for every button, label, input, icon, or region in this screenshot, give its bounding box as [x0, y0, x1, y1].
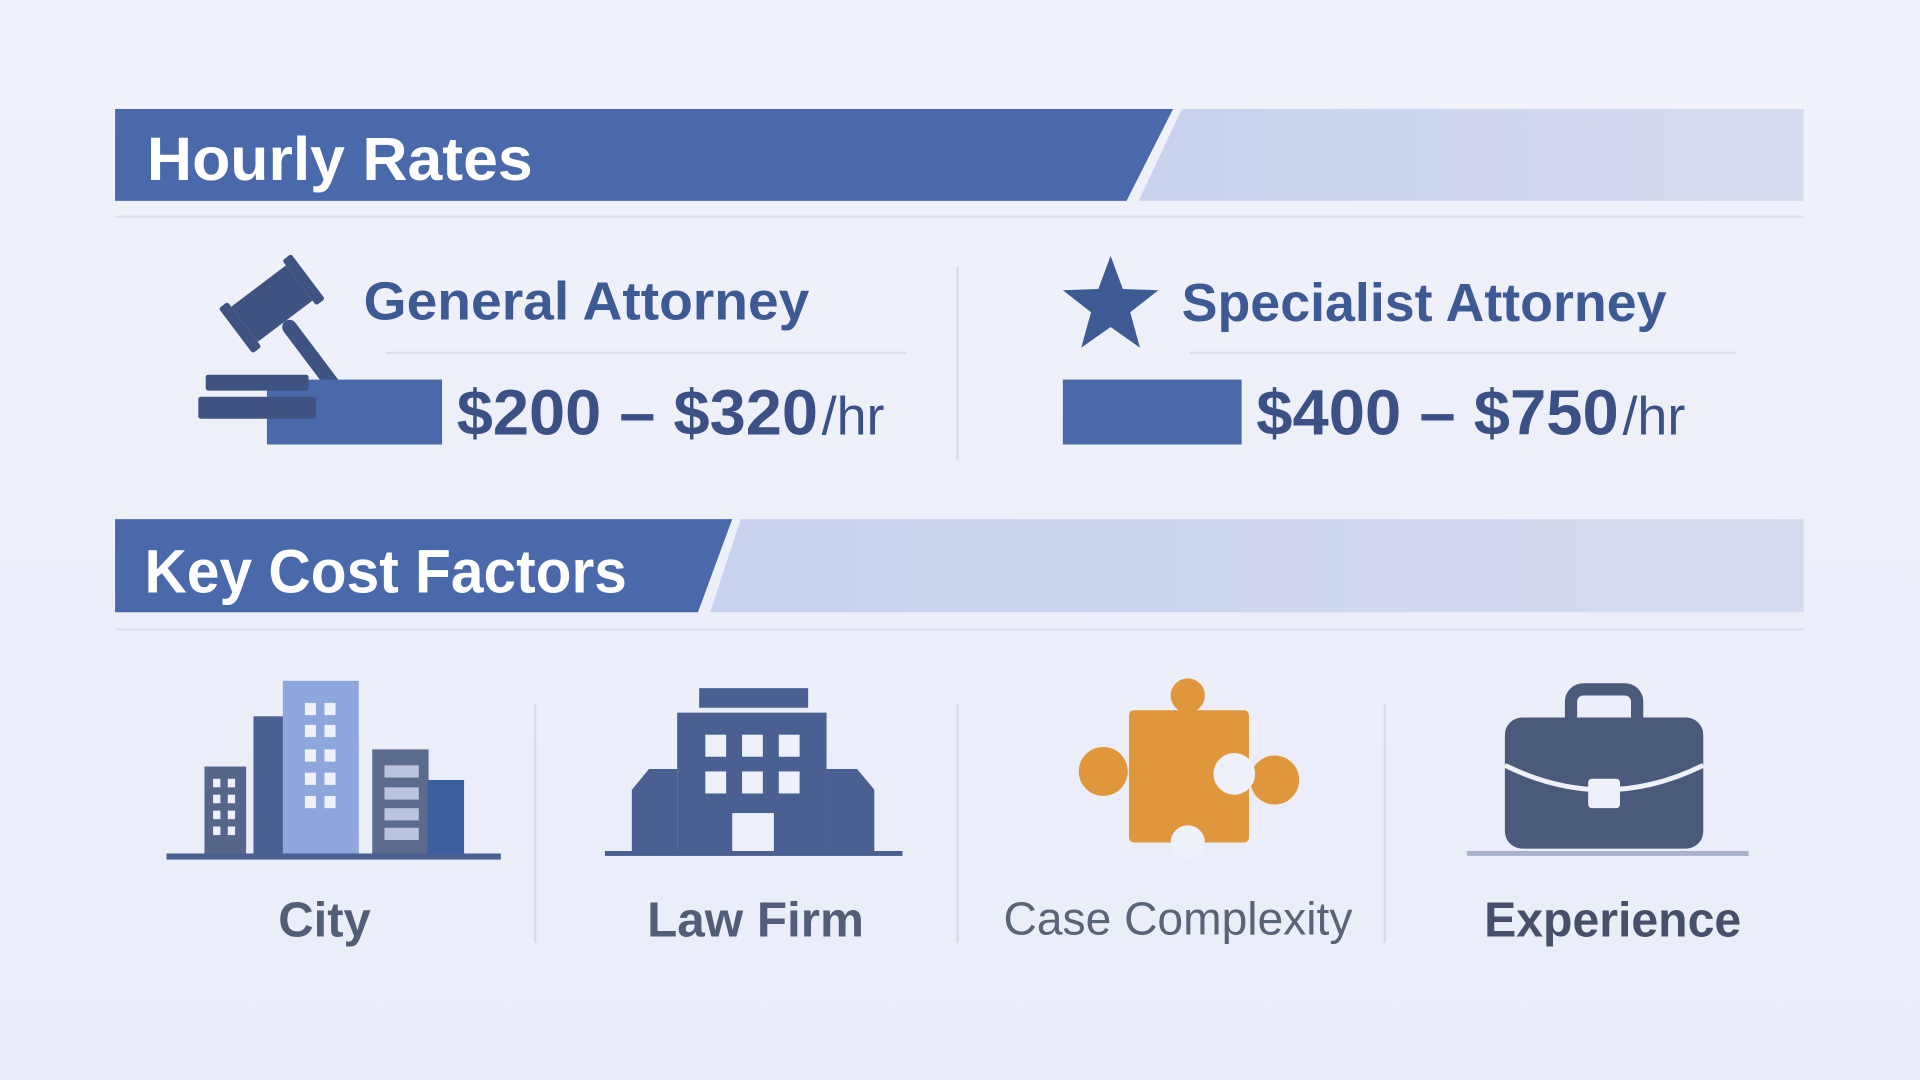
panel: general attorney	[198, 254, 906, 449]
icon: star	[1063, 256, 1158, 348]
icon: city buildings	[167, 681, 501, 860]
price: general: $200 – $320/hr	[457, 378, 885, 449]
heading: General Attorney: General Attorney	[364, 272, 809, 332]
label: Case Complexity: Case Complexity	[1003, 892, 1353, 944]
icon: puzzle piece	[1079, 678, 1299, 860]
icon: briefcase	[1467, 689, 1749, 856]
panel: specialist attorney	[1063, 256, 1736, 449]
title: Hourly Rates: Hourly Rates	[147, 125, 533, 193]
heading: Specialist Attorney: Specialist Attorney	[1182, 273, 1667, 333]
label: Law Firm: Law Firm	[647, 894, 864, 948]
title: Key Cost Factors: Key Cost Factors	[144, 538, 627, 606]
label: Experience: Experience	[1484, 894, 1741, 948]
price: specialist: $400 – $750 /hr	[1256, 378, 1685, 449]
header bar: Key Cost Factors	[115, 519, 1804, 612]
factor: city	[167, 681, 501, 948]
label: City: City	[278, 894, 371, 948]
icon: law firm building	[605, 688, 902, 856]
factor: case complexity	[1003, 678, 1353, 944]
factor: experience	[1467, 689, 1749, 948]
factor: law firm	[605, 688, 902, 948]
icon: gavel	[198, 254, 442, 444]
header bar: Hourly Rates	[115, 109, 1804, 201]
